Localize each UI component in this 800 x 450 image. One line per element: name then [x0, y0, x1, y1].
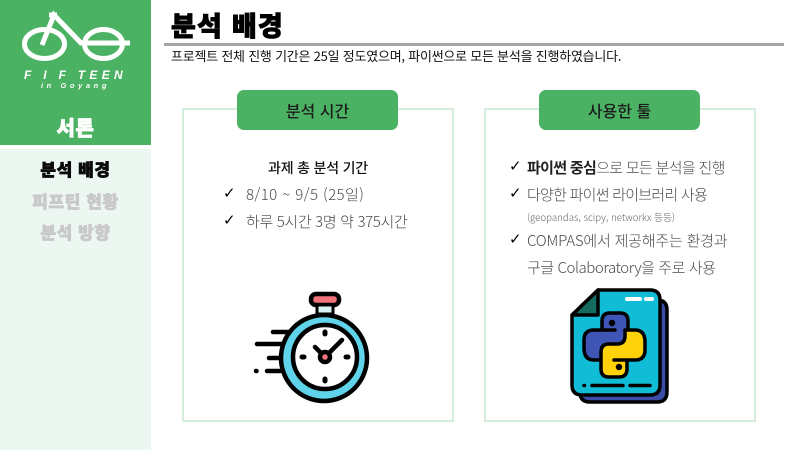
checklist item: COMPAS에서 제공해주는 환경과: [527, 230, 727, 251]
subtitle text: 프로젝트 전체 진행 기간은 25일 정도였으며, 파이썬으로 모든 분석을 진행하였습니다.: [171, 46, 621, 65]
nav item: 분석 방향: [40, 219, 111, 244]
text: period heading: 과제 총 분석 기간: [268, 158, 368, 178]
text: colaboratory line: 구글 Colaboratory을 주로 사용: [527, 257, 716, 278]
panel heading: 사용한 툴: [588, 98, 651, 122]
checklist item: ✓: [509, 157, 522, 175]
checklist item: ✓: [223, 184, 236, 202]
icon: python document: [570, 288, 669, 404]
checklist item: ✓: [509, 184, 522, 202]
title rule: [164, 43, 784, 46]
checklist item: ✓: [223, 211, 236, 229]
panel heading: [237, 90, 398, 130]
panel border: [182, 108, 454, 422]
checklist item: 파이썬 중심으로 모든 분석을 진행: [527, 157, 725, 178]
panel: tools used: [484, 90, 756, 422]
page title: 분석 배경: [171, 5, 284, 44]
panel: analysis time: [182, 90, 454, 422]
panel heading: [539, 90, 700, 130]
checklist item: 다양한 파이썬 라이브러리 사용: [527, 184, 707, 205]
sidebar navigation panel: [0, 149, 151, 450]
icon: stopwatch: [254, 292, 370, 404]
library note: (geopandas, scipy, networkx 등등): [527, 210, 675, 224]
logo wordmark: F I F TEEN: [24, 68, 127, 82]
checklist item: 하루 5시간 3명 약 375시간: [246, 211, 407, 232]
nav item: 피프틴 현황: [32, 188, 119, 213]
logo subtitle: in Goyang: [41, 81, 110, 90]
nav item: active: 분석 배경: [40, 156, 111, 181]
panel border: [484, 108, 756, 422]
section title: 서론: [56, 112, 94, 141]
panel heading: 분석 시간: [286, 98, 349, 122]
sidebar logo panel: [0, 0, 151, 145]
icon: bicycle logo: [22, 10, 130, 61]
checklist item: ✓: [509, 230, 522, 248]
checklist item: 8/10 ~ 9/5 (25일): [246, 184, 364, 205]
